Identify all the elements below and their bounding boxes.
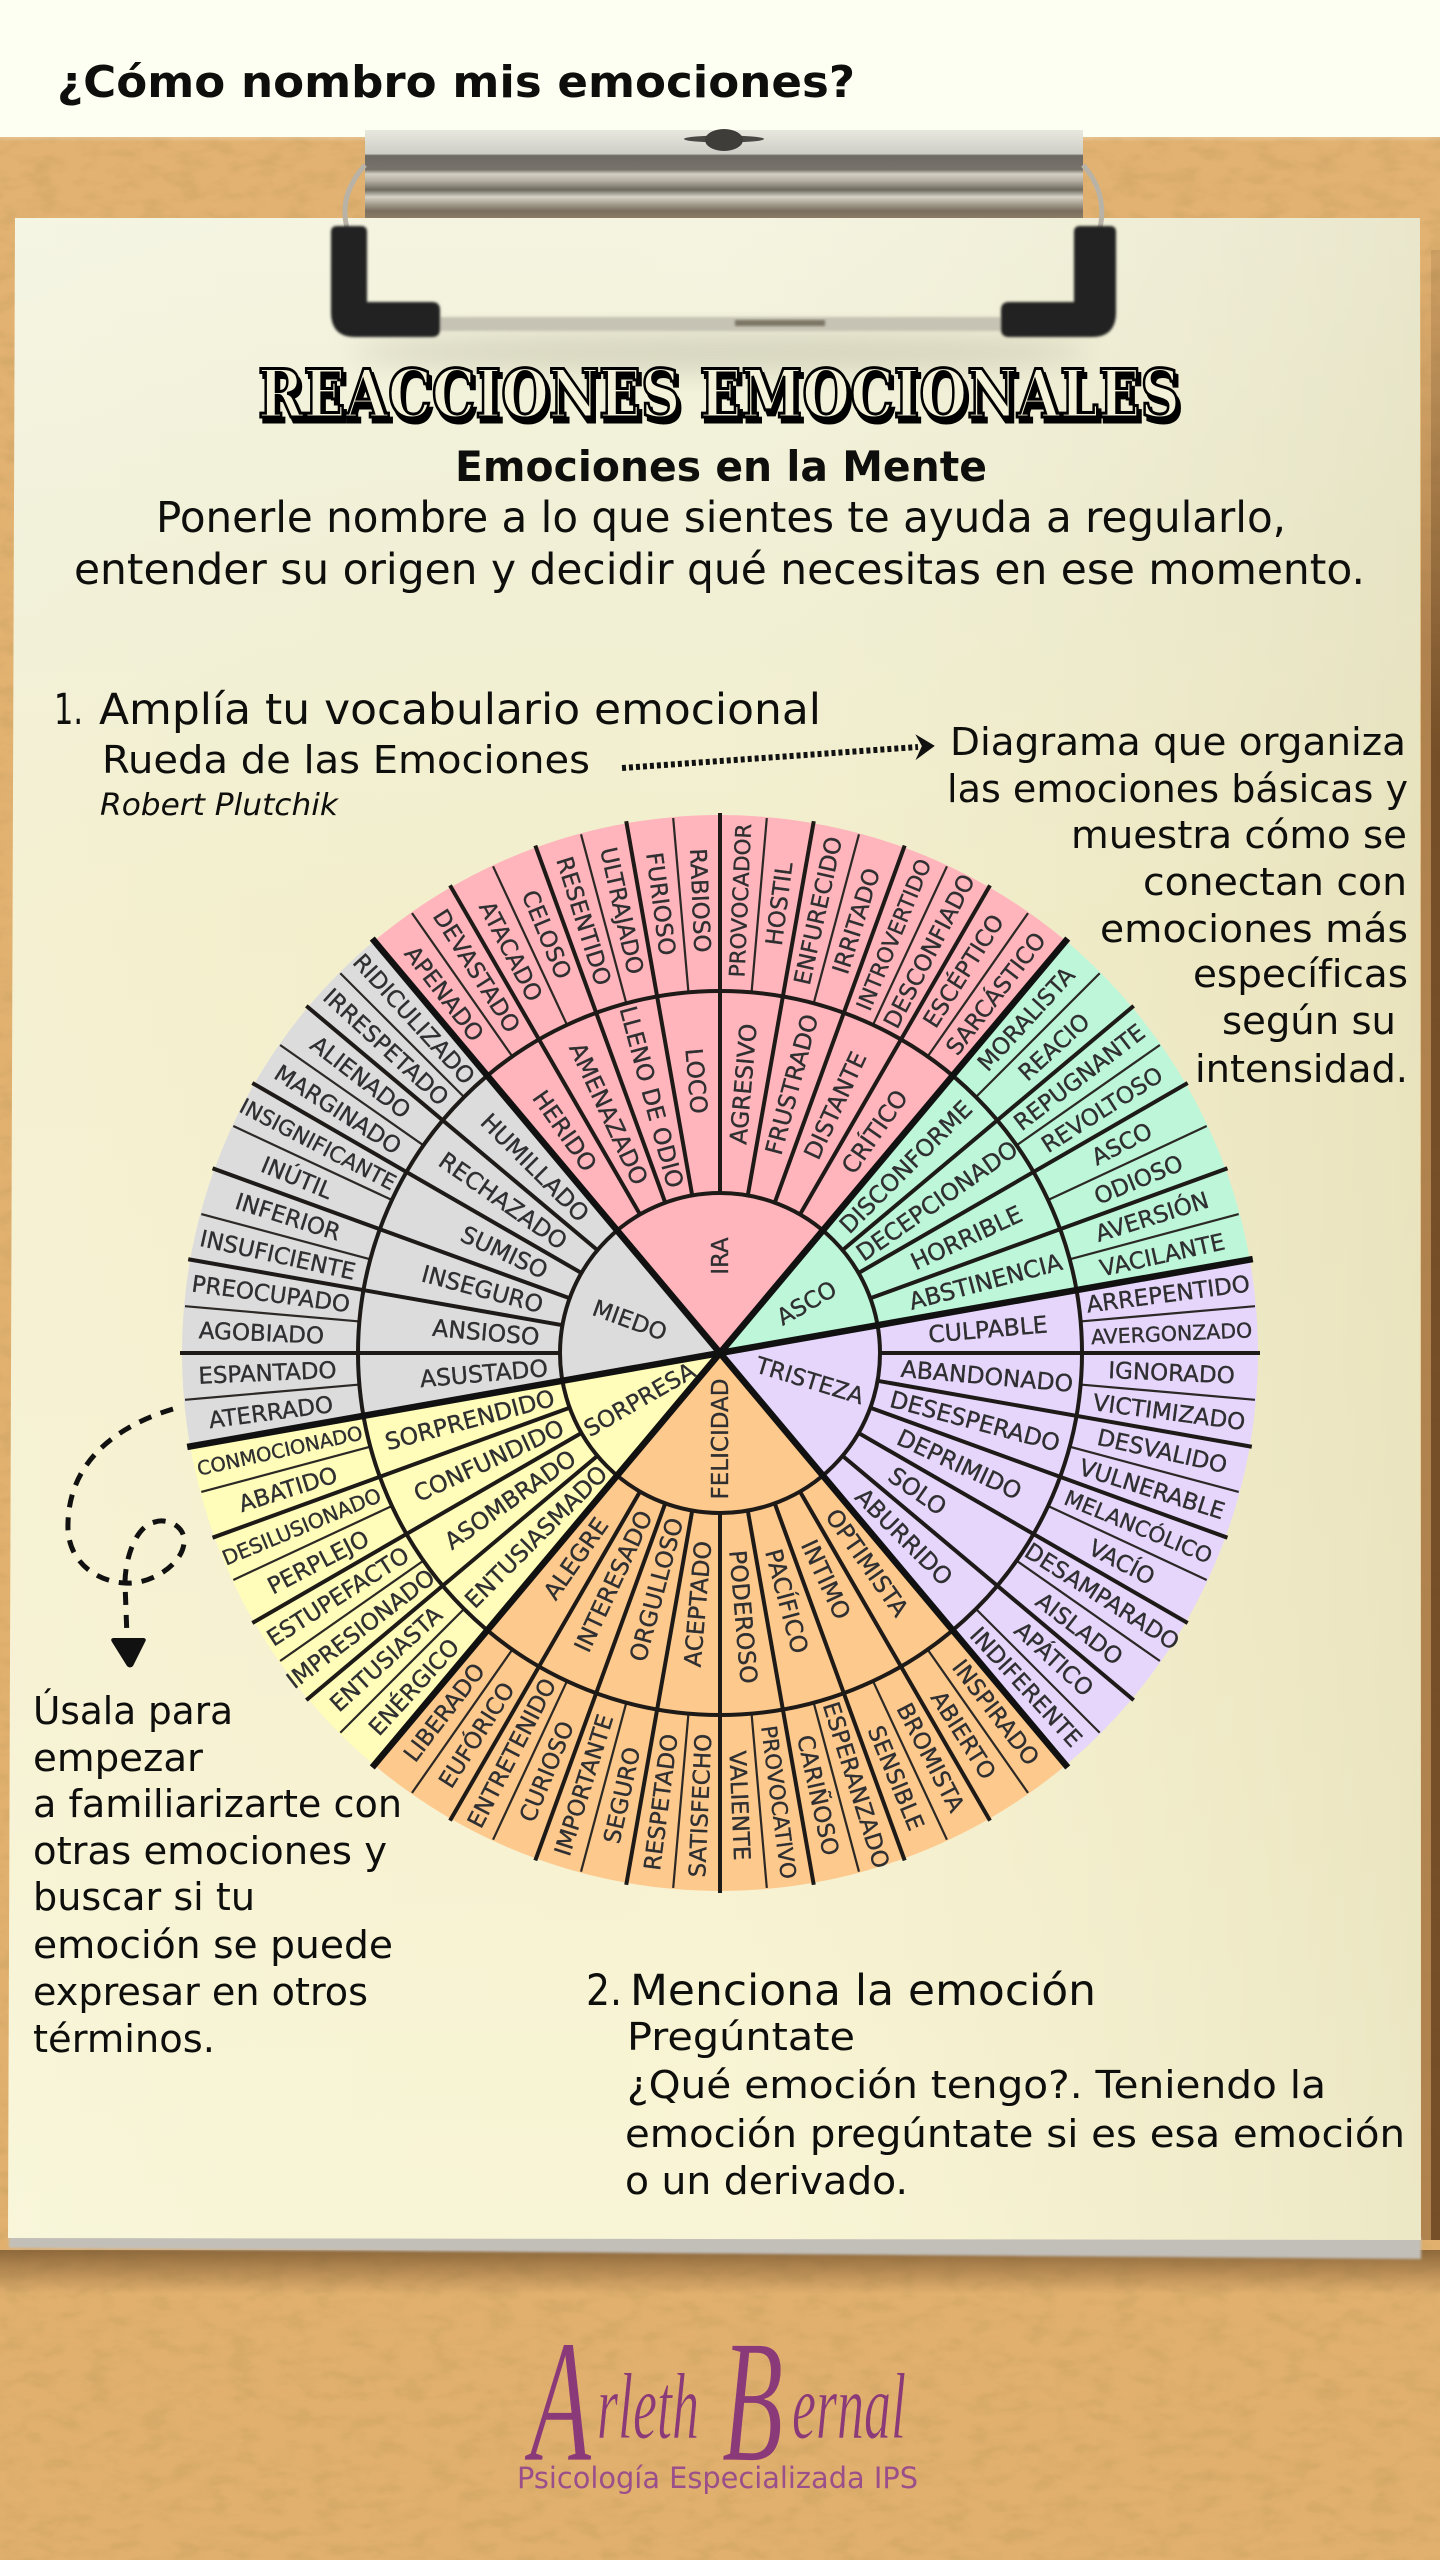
signature: A xyxy=(524,2304,592,2498)
text block: usage note: otras emociones y xyxy=(33,1829,387,1873)
sector: felicidad: BROMISTA xyxy=(891,1699,969,1817)
sector: felicidad: SENSIBLE xyxy=(862,1722,928,1835)
sector: felicidad: CURIOSO xyxy=(515,1718,580,1826)
text block: diagram description: conectan con xyxy=(1143,860,1407,904)
sector: miedo xyxy=(180,941,720,1446)
sector: tristeza: VACÍO xyxy=(1084,1533,1160,1591)
arrow: dashed loop to note xyxy=(68,1409,184,1668)
text block: diagram description xyxy=(947,720,1408,1091)
sector: ira: HOSTIL xyxy=(762,861,798,947)
sector: sorpresa: ENTUSIASTA xyxy=(325,1602,448,1717)
sector: tristeza: IGNORADO xyxy=(1108,1358,1235,1389)
sector: asco xyxy=(720,941,1250,1353)
sector: sorpresa: ESTUPEFACTO xyxy=(263,1542,414,1652)
text block: section 2 body: emoción pregúntate si es esa emoción xyxy=(625,2112,1405,2156)
sector: ira: AGRESIVO xyxy=(724,1023,763,1146)
sector: sorpresa: ASOMBRADO xyxy=(439,1444,581,1555)
sector: ira: IRRITADO xyxy=(828,865,886,977)
sector: sorpresa: SORPRENDIDO xyxy=(382,1384,558,1456)
sector: asco: HORRIBLE xyxy=(906,1200,1027,1276)
sector: felicidad xyxy=(374,1353,1066,1893)
sector: felicidad: INTERESADO xyxy=(568,1506,659,1657)
sector: miedo: INÚTIL xyxy=(257,1151,337,1205)
sector: felicidad: ORGULLOSO xyxy=(624,1515,689,1665)
section 1 heading: Amplía tu vocabulario emocional xyxy=(99,685,821,735)
sector: tristeza xyxy=(720,1260,1260,1765)
sector: tristeza: ARREPENTIDO xyxy=(1085,1271,1251,1319)
arrow: dotted to diagram description xyxy=(622,737,933,768)
sector: felicidad: VALIENTE xyxy=(723,1750,754,1861)
sector: felicidad: EUFÓRICO xyxy=(433,1677,521,1793)
sector: asco: DISCONFORME xyxy=(834,1095,978,1239)
sector: miedo: PREOCUPADO xyxy=(190,1272,351,1318)
text block: diagram description: Diagrama que organiza xyxy=(950,720,1406,764)
sector: tristeza: APÁTICO xyxy=(1009,1616,1099,1702)
sector: tristeza: DESAMPARADO xyxy=(1020,1539,1183,1656)
sector: felicidad: PROVOCATIVO xyxy=(755,1724,800,1881)
sector: tristeza: MELANCÓLICO xyxy=(1060,1485,1216,1569)
sector: tristeza: AVERGONZADO xyxy=(1091,1318,1253,1349)
sector: felicidad: ABIERTO xyxy=(925,1687,1000,1784)
text block: diagram description: las emociones básicas y xyxy=(947,767,1408,811)
sector: tristeza: ABURRIDO xyxy=(850,1483,958,1591)
sector: felicidad: PODEROSO xyxy=(723,1549,763,1685)
sector: miedo: RECHAZADO xyxy=(433,1146,572,1256)
text block: usage note: términos. xyxy=(33,2017,215,2061)
sector: felicidad: PACÍFICO xyxy=(759,1546,814,1657)
sector: tristeza: VICTIMIZADO xyxy=(1091,1390,1247,1436)
sector: miedo: INSEGURO xyxy=(419,1260,546,1319)
sector: tristeza: DEPRIMIDO xyxy=(893,1424,1026,1506)
sector: ira: CRÍTICO xyxy=(836,1085,914,1179)
sector: ira: FURIOSO xyxy=(640,851,680,957)
sector: ira: RABIOSO xyxy=(684,848,715,953)
sector: ira: DEVASTADO xyxy=(427,905,525,1038)
sector: ira: ESCÉPTICO xyxy=(917,909,1010,1033)
sector: ira: HERIDO xyxy=(527,1085,603,1177)
sector: ira: DESCONFIADO xyxy=(879,870,981,1033)
sector: ira: AMENAZADO xyxy=(563,1038,654,1189)
sector: tristeza: INDIFERENTE xyxy=(964,1623,1086,1753)
sector: sorpresa: IMPRESIONADO xyxy=(282,1565,440,1694)
text block: section 2 body: ¿Qué emoción tengo?. Teniendo la xyxy=(627,2063,1326,2107)
sector: ira: DISTANTE xyxy=(798,1047,872,1164)
sector: asco: ASCO xyxy=(1088,1118,1157,1171)
intro text: entender su origen y decidir qué necesitas en ese momento. xyxy=(74,545,1365,595)
text block: diagram description: específicas xyxy=(1193,952,1408,996)
signature: B xyxy=(722,2304,783,2498)
paper sheet xyxy=(8,218,1421,2259)
signature: rleth xyxy=(597,2353,712,2459)
sector: tristeza: DESESPERADO xyxy=(887,1385,1063,1457)
sector: sorpresa: ENÉRGICO xyxy=(363,1633,465,1741)
sector: sorpresa: PERPLEJO xyxy=(264,1526,374,1600)
sector: miedo: HUMILLADO xyxy=(475,1108,595,1228)
text block: diagram description: muestra cómo se xyxy=(1071,813,1407,857)
sector: felicidad: CARIÑOSO xyxy=(791,1732,845,1858)
sector: felicidad: ENTRETENIDO xyxy=(463,1674,562,1833)
text block: usage note: emoción se puede xyxy=(33,1923,393,1967)
sector: miedo: ANSIOSO xyxy=(431,1314,541,1351)
sector: miedo: ESPANTADO xyxy=(198,1358,337,1390)
sector: asco: MORALISTA xyxy=(973,962,1081,1077)
signature: ernal xyxy=(792,2353,906,2459)
sector: sorpresa: DESILUSIONADO xyxy=(219,1483,385,1570)
chart: rueda de las emociones xyxy=(180,813,1260,1893)
sector: tristeza: TRISTEZA xyxy=(752,1352,867,1410)
sector: miedo: SUMISO xyxy=(456,1220,552,1285)
sector: felicidad: RESPETADO xyxy=(640,1732,684,1872)
text block: section 2 body: Pregúntate xyxy=(627,2015,855,2059)
sector: miedo: INSIGNIFICANTE xyxy=(235,1094,400,1196)
sector: ira: ATACADO xyxy=(473,897,547,1006)
sector: asco: AVERSIÓN xyxy=(1092,1186,1212,1248)
text block: usage note: expresar en otros xyxy=(33,1970,368,2014)
sector: asco: VACILANTE xyxy=(1098,1229,1227,1282)
sector: felicidad: IMPORTANTE xyxy=(550,1711,619,1859)
sector: sorpresa: CONFUNDIDO xyxy=(409,1414,568,1508)
sector: tristeza: DESVALIDO xyxy=(1095,1425,1229,1479)
sector: miedo: MIEDO xyxy=(589,1296,670,1346)
sector: felicidad: SEGURO xyxy=(600,1745,646,1846)
sector: asco: ABSTINENCIA xyxy=(906,1248,1065,1316)
intro text xyxy=(74,493,1365,595)
sector: felicidad: FELICIDAD xyxy=(708,1379,734,1499)
sector: ira: LLENO DE ODIO xyxy=(614,1003,689,1191)
sector: sorpresa: ENTUSIASMADO xyxy=(459,1460,613,1614)
sector: felicidad: SATISFECHO xyxy=(685,1733,717,1878)
sector: miedo: ATERRADO xyxy=(207,1392,335,1434)
sector: ira: ULTRAJADO xyxy=(594,845,648,977)
sector: ira: FRUSTRADO xyxy=(760,1011,824,1158)
sector: miedo: ASUSTADO xyxy=(419,1354,549,1393)
section 1 subheading: Rueda de las Emociones xyxy=(102,738,590,782)
sector: ira: ENFURECIDO xyxy=(790,834,848,987)
intro text: Ponerle nombre a lo que sientes te ayuda a regularlo, xyxy=(156,493,1286,543)
heading: reacciones emocionales: REACCIONES EMOCIONALES xyxy=(258,355,1180,433)
author credit: Robert Plutchik xyxy=(100,788,340,823)
text block: usage note: a familiarizarte con xyxy=(33,1782,402,1826)
sector: sorpresa: CONMOCIONADO xyxy=(195,1422,365,1481)
page title: ¿Cómo nombro mis emociones? xyxy=(57,57,855,108)
sector: felicidad: ALEGRE xyxy=(538,1512,614,1605)
section 2 heading: Menciona la emoción xyxy=(630,1966,1096,2016)
sector: asco: ASCO xyxy=(773,1276,842,1331)
sector: ira: LOCO xyxy=(679,1047,713,1115)
text block: diagram description: intensidad. xyxy=(1195,1047,1408,1091)
sector: ira: PROVOCADOR xyxy=(725,823,757,978)
section 2 heading: 2. xyxy=(586,1966,622,2016)
sector: tristeza: ABANDONADO xyxy=(900,1355,1074,1398)
text block: section 2 body: o un derivado. xyxy=(625,2159,908,2203)
sector: miedo: INFERIOR xyxy=(232,1189,343,1246)
sector: felicidad: ACEPTADO xyxy=(679,1540,717,1668)
sector: ira: CELOSO xyxy=(516,887,576,983)
sector: miedo: INSUFICIENTE xyxy=(197,1226,358,1286)
sector: miedo: MARGINADO xyxy=(269,1061,406,1160)
sector: felicidad: LIBERADO xyxy=(399,1659,491,1767)
sector: tristeza: SOLO xyxy=(883,1461,952,1521)
text block: usage note: Úsala para xyxy=(33,1689,233,1733)
clip: metal bar, knob and black handles xyxy=(331,129,1116,372)
sector: asco: REPUGNANTE xyxy=(1010,1020,1150,1136)
sector: felicidad: INSPIRADO xyxy=(946,1655,1044,1771)
subtitle: Emociones en la Mente xyxy=(455,442,987,491)
sector: ira: APENADO xyxy=(399,942,488,1047)
sector: ira xyxy=(374,813,1066,1353)
sector: sorpresa: ABATIDO xyxy=(236,1462,341,1518)
text block: usage note: buscar si tu xyxy=(33,1875,255,1919)
text block: usage note xyxy=(33,1689,402,2061)
sector: tristeza: VULNERABLE xyxy=(1076,1455,1228,1525)
sector: sorpresa: SORPRESA xyxy=(580,1358,700,1443)
section 1 heading: 1. xyxy=(54,685,83,735)
sector: felicidad: INTIMO xyxy=(795,1535,856,1624)
text block: diagram description: emociones más xyxy=(1100,907,1408,951)
sector: ira: IRA xyxy=(708,1237,734,1275)
sector: miedo: ALIENADO xyxy=(305,1032,415,1124)
sector: sorpresa xyxy=(190,1353,720,1765)
sector: ira: RESENTIDO xyxy=(550,854,615,989)
sector: ira: SARCÁSTICO xyxy=(940,927,1052,1060)
sector: felicidad: ESPERANZADO xyxy=(817,1699,894,1872)
sector: tristeza: CULPABLE xyxy=(927,1310,1049,1349)
sector: asco: ODIOSO xyxy=(1091,1151,1187,1210)
sector: felicidad: OPTIMISTA xyxy=(820,1504,914,1622)
sector: ira: INTROVERTIDO xyxy=(852,856,937,1015)
sector: asco: REVOLTOSO xyxy=(1037,1062,1168,1159)
sector: asco: DECEPCIONADO xyxy=(851,1135,1023,1267)
sector: miedo: AGOBIADO xyxy=(198,1318,325,1350)
sector: miedo: IRRESPETADO xyxy=(318,984,453,1111)
text block: section 2 body xyxy=(625,2015,1405,2203)
text block: usage note: empezar xyxy=(33,1736,203,1780)
sector: asco: REACIO xyxy=(1014,1009,1095,1087)
text block: diagram description: según su xyxy=(1222,999,1396,1043)
sector: miedo: RIDICULIZADO xyxy=(347,949,479,1090)
sector: tristeza: AISLADO xyxy=(1030,1588,1127,1671)
footer: tagline: Psicología Especializada IPS xyxy=(517,2461,918,2495)
